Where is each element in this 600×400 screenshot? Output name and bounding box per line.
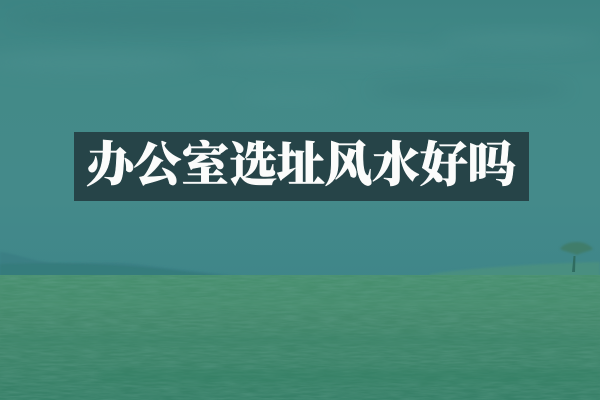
title: 办公室选址风水好吗 <box>86 139 515 192</box>
icon: acacia tree <box>560 242 593 272</box>
title banner <box>74 132 529 201</box>
